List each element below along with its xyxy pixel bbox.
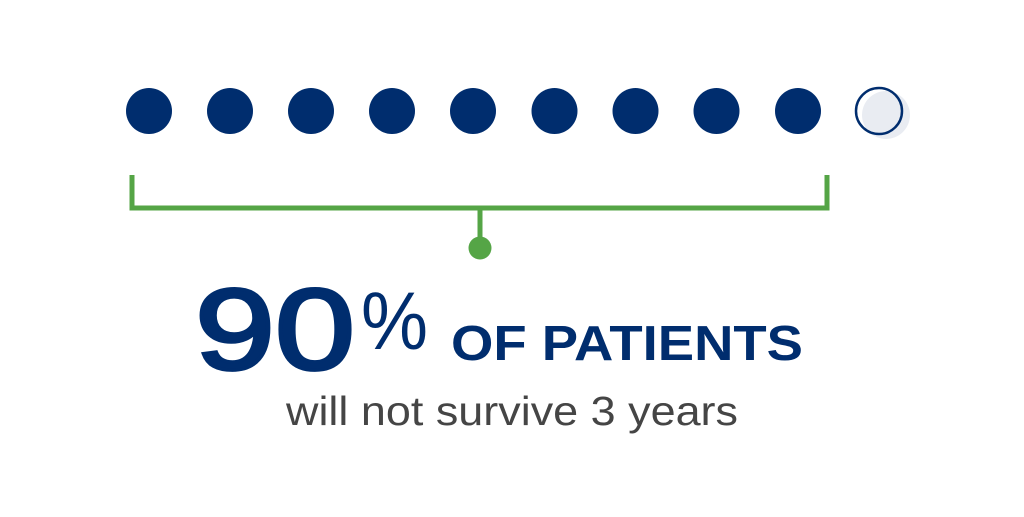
green bracket with pointer <box>132 175 827 260</box>
hollow dot with shadow <box>856 88 910 139</box>
percent sign: % <box>361 276 428 367</box>
of patients: OF PATIENTS <box>451 317 803 371</box>
dot row: nine filled, one hollow <box>126 88 910 139</box>
filled dots <box>126 88 821 134</box>
headline <box>195 266 803 394</box>
90: 90 <box>195 266 355 394</box>
subheading: will not survive 3 years <box>285 388 738 434</box>
